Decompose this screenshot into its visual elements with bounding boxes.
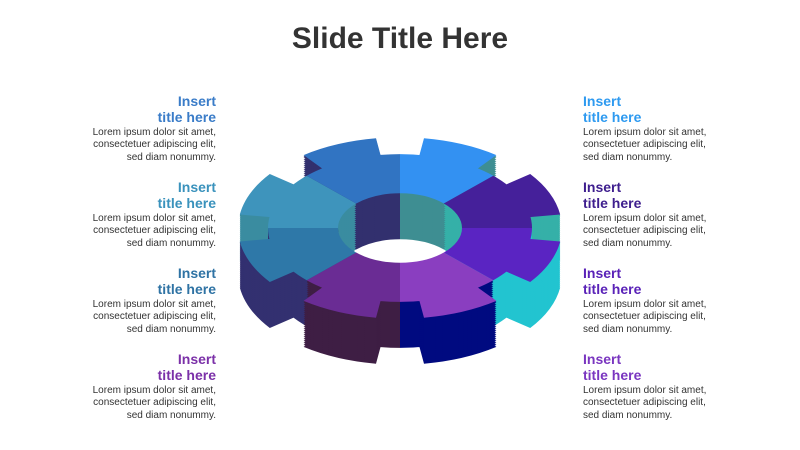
text block: right 2 xyxy=(583,179,706,249)
text block: left 3: Insert xyxy=(178,265,216,281)
text block: right 4: Lorem ipsum dolor sit amet, xyxy=(583,385,706,396)
text block: right 2: sed diam nonummy. xyxy=(583,238,672,249)
text block: left 4: consectetuer adipiscing elit, xyxy=(93,397,216,408)
text block: left 2: Lorem ipsum dolor sit amet, xyxy=(93,213,216,224)
text block: right 2: title here xyxy=(583,195,641,211)
text block: right 3 xyxy=(583,265,706,335)
text block: right 3: consectetuer adipiscing elit, xyxy=(583,311,706,322)
text block: right 4: sed diam nonummy. xyxy=(583,410,672,421)
text block: right 3: title here xyxy=(583,281,641,297)
text block: right 3: Insert xyxy=(583,265,621,281)
text block: left 3: consectetuer adipiscing elit, xyxy=(93,311,216,322)
text block: left 3 xyxy=(93,265,216,335)
text block: left 3: Lorem ipsum dolor sit amet, xyxy=(93,299,216,310)
text block: left 1: Insert xyxy=(178,93,216,109)
text block: left 4: Lorem ipsum dolor sit amet, xyxy=(93,385,216,396)
text block: right 1 xyxy=(583,93,706,163)
text block: right 4 xyxy=(583,351,706,421)
text block: right 1: Lorem ipsum dolor sit amet, xyxy=(583,127,706,138)
text block: right 3: sed diam nonummy. xyxy=(583,324,672,335)
text block: left 3: sed diam nonummy. xyxy=(127,324,216,335)
text block: right 3: Lorem ipsum dolor sit amet, xyxy=(583,299,706,310)
text block: left 1: title here xyxy=(158,109,216,125)
text block: left 4 xyxy=(93,351,216,421)
text block: left 1 xyxy=(93,93,216,163)
text block: left 3: title here xyxy=(158,281,216,297)
text block: left 1: consectetuer adipiscing elit, xyxy=(93,139,216,150)
text block: left 2: consectetuer adipiscing elit, xyxy=(93,225,216,236)
text block: left 2: sed diam nonummy. xyxy=(127,238,216,249)
text block: right 4: consectetuer adipiscing elit, xyxy=(583,397,706,408)
text block: right 1: title here xyxy=(583,109,641,125)
text block: left 4: title here xyxy=(158,367,216,383)
text block: left 2: Insert xyxy=(178,179,216,195)
text block: right 1: Insert xyxy=(583,93,621,109)
text block: right 2: consectetuer adipiscing elit, xyxy=(583,225,706,236)
text block: right 4: Insert xyxy=(583,351,621,367)
text block: right 4: title here xyxy=(583,367,641,383)
text block: left 2: title here xyxy=(158,195,216,211)
text block: left 2 xyxy=(93,179,216,249)
text block: left 4: sed diam nonummy. xyxy=(127,410,216,421)
text block: right 1: consectetuer adipiscing elit, xyxy=(583,139,706,150)
text block: right 2: Lorem ipsum dolor sit amet, xyxy=(583,213,706,224)
title: Slide Title Here xyxy=(292,22,508,55)
text block: right 2: Insert xyxy=(583,179,621,195)
text block: left 4: Insert xyxy=(178,351,216,367)
text block: left 1: Lorem ipsum dolor sit amet, xyxy=(93,127,216,138)
text block: left 1: sed diam nonummy. xyxy=(127,152,216,163)
text block: right 1: sed diam nonummy. xyxy=(583,152,672,163)
